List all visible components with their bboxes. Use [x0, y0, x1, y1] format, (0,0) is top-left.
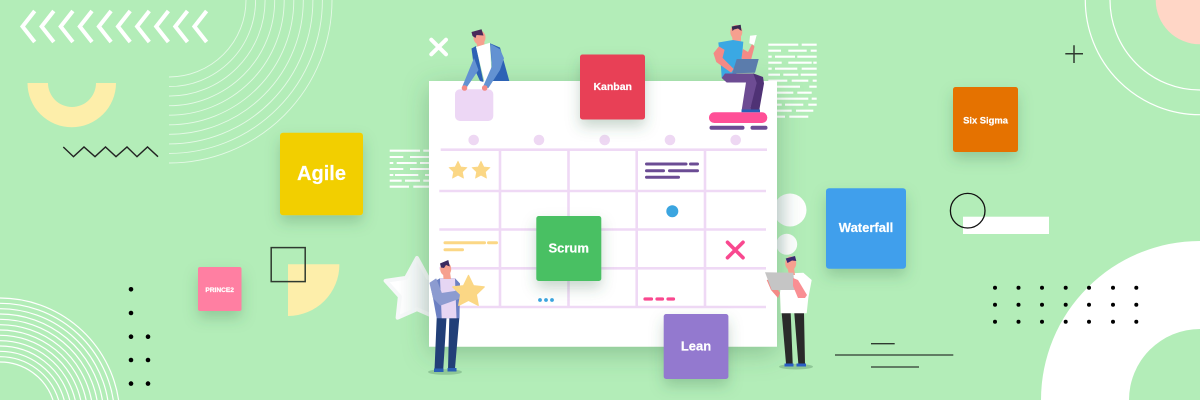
card: Six Sigma: Six Sigma	[963, 114, 1009, 125]
text lines right of calendar	[768, 45, 817, 117]
yellow note lines	[445, 243, 496, 250]
shirt	[780, 273, 812, 313]
dot grid right	[993, 286, 1138, 324]
legs	[434, 318, 459, 370]
pink X mark	[728, 242, 743, 258]
chevron row	[22, 11, 207, 42]
card: Waterfall: Waterfall	[839, 220, 893, 235]
card: Scrum	[536, 216, 601, 281]
hair	[786, 256, 796, 263]
card: Scrum: Scrum	[548, 240, 589, 256]
right arm	[742, 44, 754, 61]
calendar binding dots	[468, 135, 741, 145]
dots left	[129, 287, 150, 386]
shirt	[476, 43, 492, 82]
laptop	[732, 59, 759, 73]
tablet	[765, 272, 795, 290]
outlined square	[271, 248, 305, 282]
shirt	[718, 40, 743, 78]
purple note lines	[646, 164, 698, 177]
white X mark	[431, 40, 446, 54]
head	[474, 30, 486, 44]
big white star	[386, 258, 448, 318]
shirt	[440, 278, 456, 318]
card: Kanban	[580, 54, 645, 120]
neck	[476, 38, 484, 48]
card: Six Sigma	[953, 87, 1018, 152]
blue dots	[538, 298, 554, 302]
left arm	[714, 47, 733, 72]
shoes	[434, 368, 456, 372]
left arm	[462, 58, 478, 88]
white circles right of calendar	[774, 194, 806, 255]
rating stars in cell	[449, 161, 490, 178]
rings top right	[1085, 0, 1200, 115]
card: Agile	[280, 133, 363, 215]
ground shadow	[779, 364, 813, 370]
head	[730, 25, 742, 39]
front leg	[722, 74, 757, 110]
concentric arcs bottom left	[0, 298, 119, 400]
yellow quarter circle	[288, 264, 339, 316]
hair	[440, 260, 450, 268]
right arm	[483, 44, 504, 88]
neck	[788, 268, 795, 275]
card: Kanban: Kanban	[593, 81, 632, 93]
calendar sheet	[429, 81, 777, 347]
text lines left of calendar	[390, 151, 430, 187]
lilac note	[455, 89, 493, 121]
person holding star	[428, 260, 484, 375]
card: Waterfall	[826, 188, 906, 269]
shoes	[784, 364, 806, 366]
outlined circle	[950, 193, 985, 228]
head	[785, 256, 796, 270]
legs	[782, 313, 805, 364]
head	[440, 262, 451, 276]
blue dot	[666, 205, 678, 217]
ground shadow	[428, 369, 462, 375]
white rectangle	[963, 217, 1049, 234]
cushion lines	[712, 126, 766, 130]
neck	[732, 36, 741, 44]
person with tablet	[765, 256, 813, 370]
hair	[732, 25, 742, 31]
hands	[462, 85, 467, 91]
peach quarter circle	[1156, 0, 1200, 44]
plus mark	[1065, 45, 1083, 63]
cape	[490, 43, 509, 81]
three horizontal lines	[835, 344, 953, 367]
arm	[430, 279, 460, 305]
shoes	[742, 110, 760, 112]
pink cushion	[709, 112, 767, 123]
yellow half ring	[28, 83, 116, 127]
paper	[749, 35, 757, 45]
jacket	[430, 278, 460, 318]
zigzag line	[63, 147, 158, 157]
yellow star	[453, 276, 484, 305]
neck	[443, 272, 451, 279]
calendar grid	[439, 150, 767, 307]
card: Lean: Lean	[681, 338, 711, 354]
person sitting with laptop	[709, 25, 767, 128]
concentric arcs top left	[169, 0, 332, 163]
card: Agile: Agile	[297, 163, 346, 185]
card: PRINCE2	[198, 267, 242, 311]
card: PRINCE2: PRINCE2	[205, 287, 234, 294]
left arm	[767, 279, 780, 298]
person top left with lilac note	[455, 29, 509, 121]
card: Lean	[664, 314, 728, 379]
back leg	[750, 73, 764, 110]
big white ring	[1041, 241, 1200, 400]
pink dashes	[645, 297, 674, 301]
right arm	[793, 278, 807, 298]
hair	[472, 29, 484, 38]
left jacket	[472, 46, 484, 82]
calendar panel	[429, 81, 777, 347]
